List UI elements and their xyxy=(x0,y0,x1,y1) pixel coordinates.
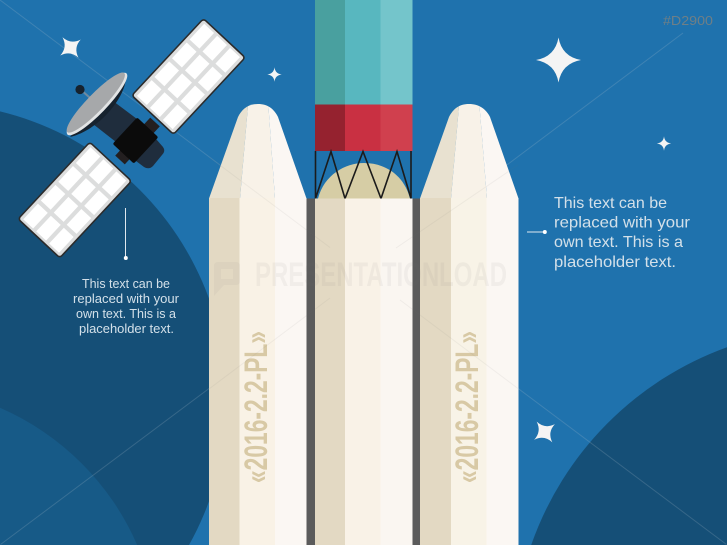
star: lower right xyxy=(526,414,563,450)
star: upper left xyxy=(52,29,89,66)
red band xyxy=(315,104,412,151)
callout left text: This text can be xyxy=(82,277,170,291)
callout right text: own text. This is a xyxy=(554,234,683,251)
watermark icon xyxy=(214,262,240,296)
satellite dish stem xyxy=(93,101,137,142)
callout right text xyxy=(554,195,691,271)
satellite body xyxy=(113,117,158,164)
dome xyxy=(318,163,410,198)
callout right text: placeholder text. xyxy=(554,254,676,271)
watermark text: PRESENTATIONLOAD xyxy=(255,256,507,294)
solar panel upper xyxy=(132,19,245,134)
left booster label: «2016-2.2-PL» xyxy=(238,331,274,483)
connector bars xyxy=(306,198,420,545)
truss xyxy=(316,151,411,198)
callout left text: placeholder text. xyxy=(79,322,174,336)
color code label: #D2900 xyxy=(663,13,713,28)
rocket xyxy=(205,0,522,545)
dish bowl xyxy=(70,74,126,137)
rocket-side diagonals xyxy=(209,157,518,389)
left nose cone xyxy=(209,104,306,198)
upper stage teal xyxy=(315,0,412,104)
watermark xyxy=(214,256,507,296)
satellite rear module xyxy=(132,132,164,168)
planet: lower right xyxy=(531,347,727,545)
antenna stick xyxy=(80,89,98,105)
right booster label: «2016-2.2-PL» xyxy=(449,331,485,483)
right nose cone xyxy=(420,104,518,198)
satellite arm xyxy=(120,122,155,160)
satellite xyxy=(18,19,245,258)
callout right text: replaced with your xyxy=(554,214,691,232)
core body xyxy=(315,198,412,545)
planet: large left xyxy=(0,111,227,545)
left booster xyxy=(205,100,310,545)
star: small near satellite xyxy=(267,67,282,82)
callout right text: This text can be xyxy=(554,195,667,212)
callout left text xyxy=(73,277,179,336)
antenna ball xyxy=(75,85,85,94)
callout left leader xyxy=(124,208,128,260)
star: small right xyxy=(657,136,671,151)
dish face xyxy=(61,67,130,138)
callout left text: own text. This is a xyxy=(76,307,176,321)
star: large upper right xyxy=(536,38,581,82)
planet: small lower left xyxy=(0,408,137,545)
callout left text: replaced with your xyxy=(73,292,179,306)
solar panel lower xyxy=(18,142,131,258)
callout right leader xyxy=(527,230,547,234)
callout left xyxy=(73,208,179,336)
callout right xyxy=(527,195,691,271)
right booster xyxy=(416,100,522,545)
dish rim xyxy=(61,67,133,141)
